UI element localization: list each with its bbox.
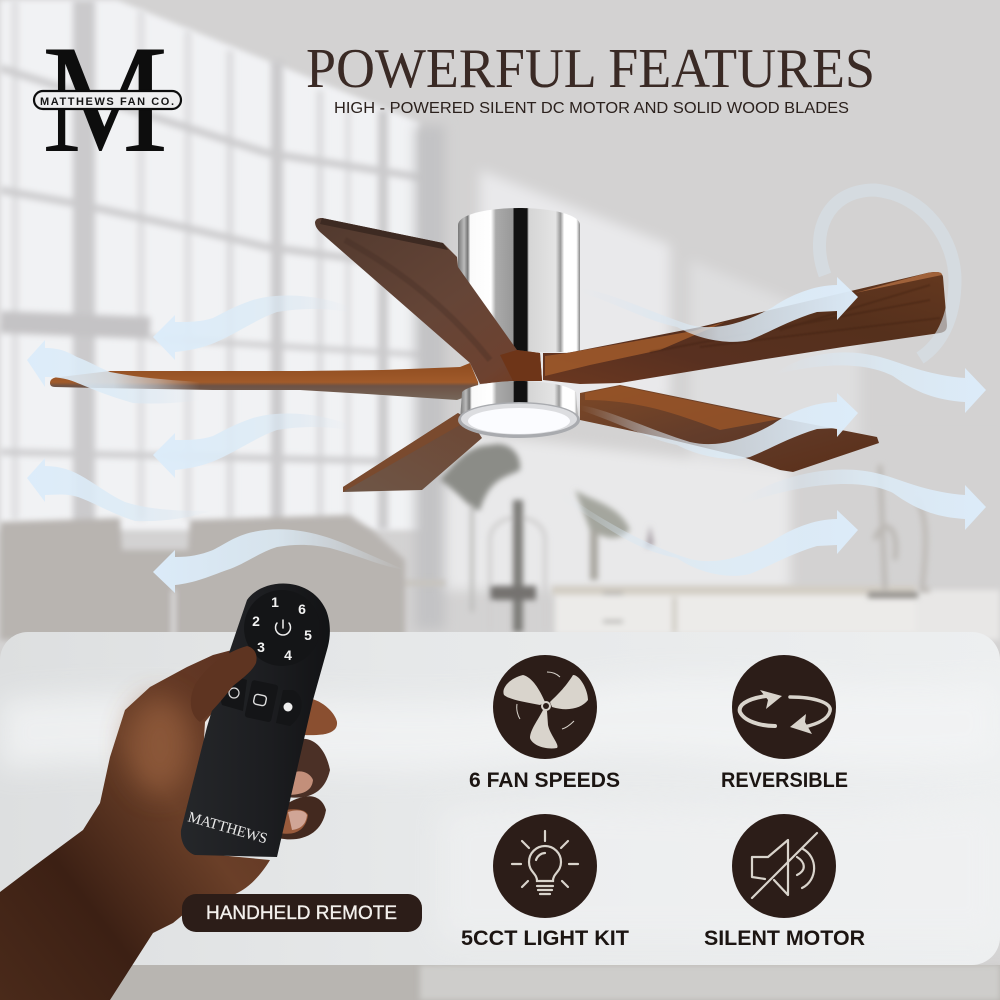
feature: silent motor xyxy=(704,814,865,950)
translucent feature panel xyxy=(0,632,1000,965)
remote speed numbers: 5 xyxy=(304,627,312,643)
window panes xyxy=(0,0,425,530)
icon: light bulb xyxy=(493,814,597,918)
blade: long left xyxy=(50,363,478,400)
title: POWERFUL FEATURES xyxy=(306,38,875,100)
walls xyxy=(415,125,1000,630)
air arrow left 2 xyxy=(153,414,350,478)
remote body xyxy=(181,584,330,857)
plants and decor xyxy=(440,444,930,632)
label: SILENT MOTOR xyxy=(704,927,865,950)
remote speed numbers: 1 xyxy=(271,594,279,610)
remote lower buttons xyxy=(221,675,302,726)
air flow swooshes xyxy=(27,190,986,593)
label: 6 FAN SPEEDS xyxy=(469,769,620,792)
feature: 5CCT light kit xyxy=(461,814,629,950)
air arrow right 2 xyxy=(580,393,858,459)
subtitle: HIGH - POWERED SILENT DC MOTOR AND SOLID WOOD BLADES xyxy=(334,100,849,117)
sofa and console xyxy=(0,515,1000,640)
LED light xyxy=(458,402,580,438)
power icon xyxy=(276,620,290,635)
remote speed numbers: 2 xyxy=(252,613,260,629)
air arrow right 3 xyxy=(560,490,858,576)
hand holding remote xyxy=(0,584,337,1000)
air arrow right 4 xyxy=(773,352,986,413)
fingers xyxy=(278,698,337,839)
air arrow right 5 xyxy=(740,469,986,530)
window mullions xyxy=(0,0,425,530)
fan canopy xyxy=(458,208,580,352)
blade: lower right xyxy=(580,385,879,472)
air arrow left 4 xyxy=(27,340,200,404)
remote brand: MATTHEWS xyxy=(186,809,269,847)
blade: upper left xyxy=(315,218,542,384)
air arrow left 5 xyxy=(27,458,215,521)
icon: fan xyxy=(493,655,597,759)
label: 5CCT LIGHT KIT xyxy=(461,927,629,950)
palm and arm xyxy=(0,646,270,1000)
remote dial xyxy=(244,590,320,666)
feature: 6 fan speeds xyxy=(469,655,620,792)
remote speed numbers: 4 xyxy=(284,647,292,663)
icon: muted speaker xyxy=(732,814,836,918)
feature: reversible xyxy=(721,655,848,792)
remote speed numbers: 3 xyxy=(257,639,265,655)
air arrow left 3 xyxy=(153,529,405,593)
swirl loop xyxy=(819,190,955,358)
thumb over remote xyxy=(191,646,257,722)
floor strip xyxy=(0,965,1000,1000)
logo: Matthews Fan Co.: M xyxy=(42,13,168,185)
air arrow left 1 xyxy=(153,296,350,360)
knuckle highlight xyxy=(128,697,192,793)
light housing xyxy=(460,381,578,420)
handheld remote label: HANDHELD REMOTE xyxy=(206,903,397,924)
icon: rotation arrows xyxy=(732,655,836,759)
blade: long right xyxy=(543,272,947,384)
blade: lower left xyxy=(343,413,482,492)
handheld remote label xyxy=(182,894,422,932)
air arrow right 1 xyxy=(580,277,858,342)
remote speed numbers: 6 xyxy=(298,601,306,617)
remote speed numbers xyxy=(252,594,312,663)
label: REVERSIBLE xyxy=(721,769,848,792)
logo: Matthews Fan Co.: MATTHEWS FAN CO. xyxy=(40,96,174,108)
ceiling fan xyxy=(50,208,947,492)
